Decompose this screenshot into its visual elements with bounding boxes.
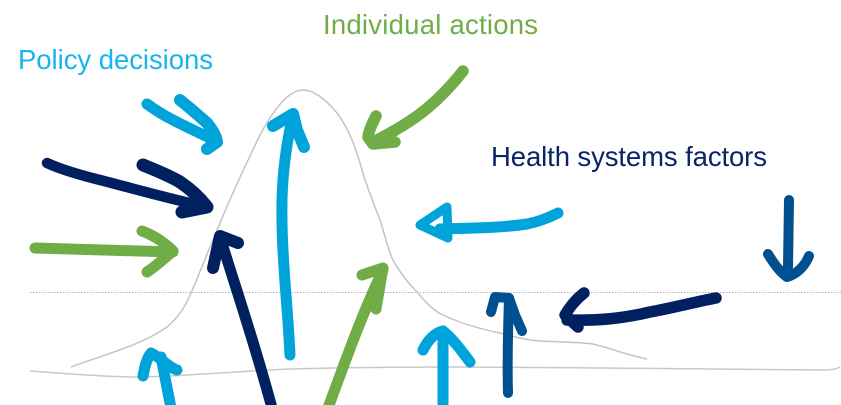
arrow: green top xyxy=(368,71,463,144)
arrow: light blue top left xyxy=(147,100,217,149)
arrow: light blue bottom left xyxy=(143,353,177,405)
baseline curve xyxy=(30,367,840,377)
dotted threshold line xyxy=(30,292,841,294)
arrow: green rising xyxy=(328,268,383,405)
arrow: navy bottom right xyxy=(565,293,716,327)
arrow: light blue right xyxy=(420,207,558,238)
title: Policy decisions: Policy decisions xyxy=(18,44,213,75)
arrow: medium blue pointing up xyxy=(491,297,522,393)
title: Health systems factors: Health systems factors xyxy=(491,141,767,172)
title: Individual actions: Individual actions xyxy=(323,9,538,40)
epidemic bell curve xyxy=(71,90,647,367)
arrow: light blue bottom centre xyxy=(423,331,470,405)
arrow: medium blue pointing down xyxy=(768,200,809,277)
arrow: navy left xyxy=(47,163,207,212)
arrow: light blue central xyxy=(273,114,304,355)
arrow: navy rising into curve xyxy=(213,236,272,405)
arrow: green left xyxy=(35,231,173,272)
